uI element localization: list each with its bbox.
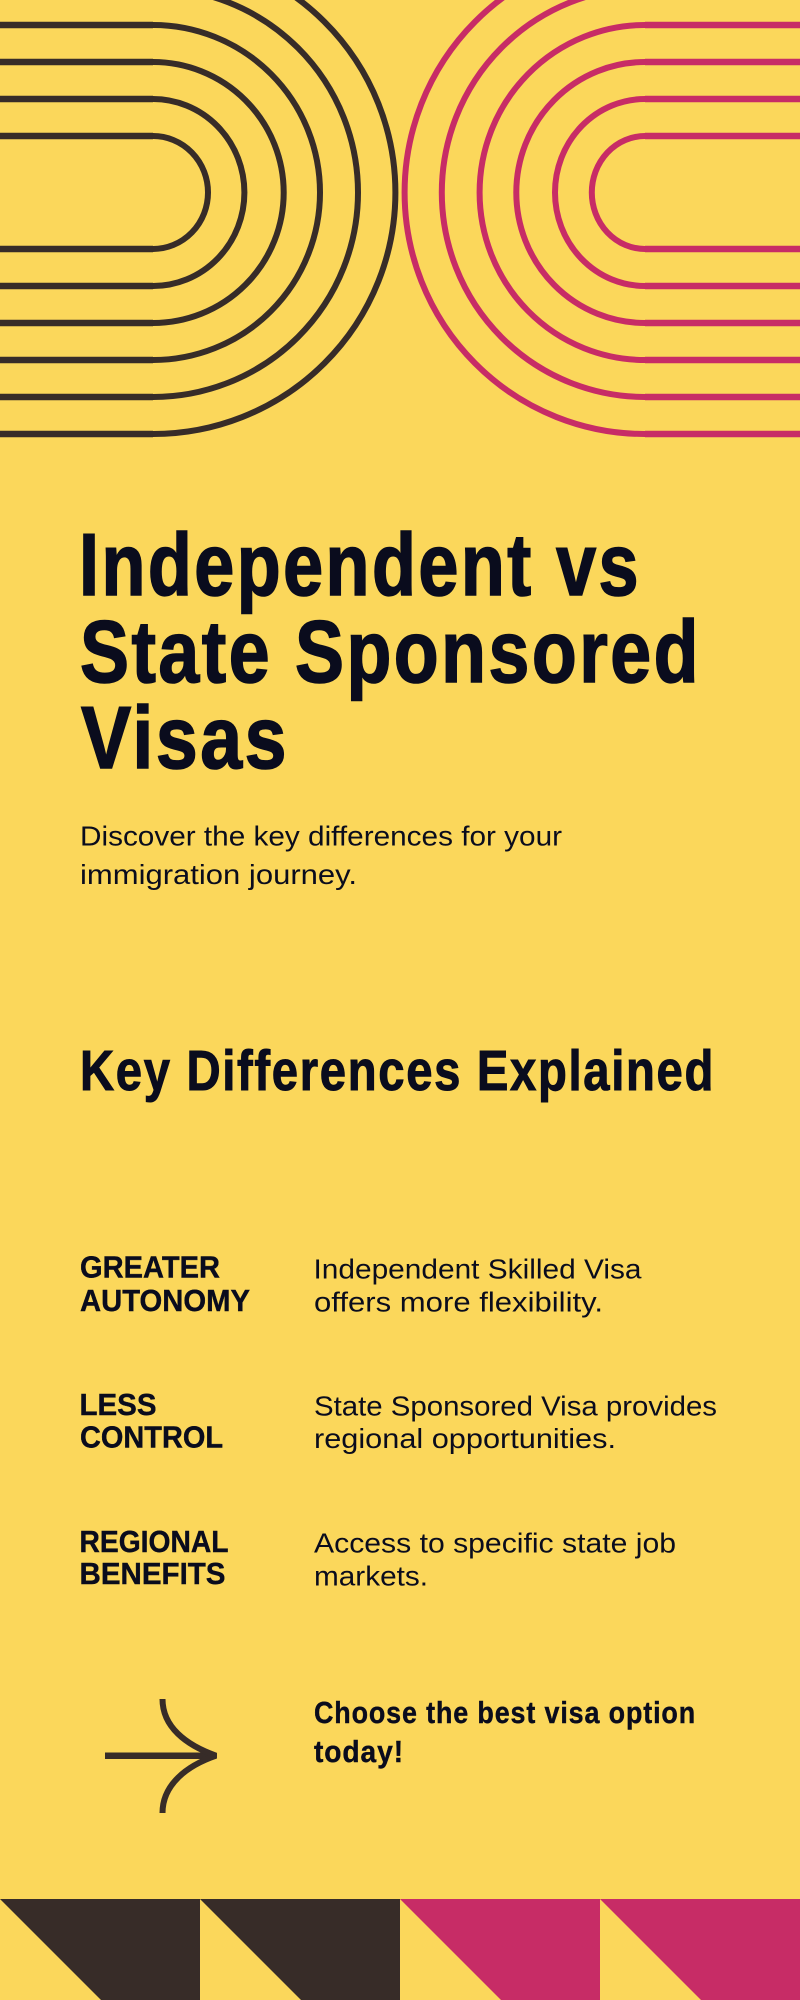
title <box>79 515 701 787</box>
subtitle <box>80 820 562 890</box>
row: regional benefits <box>80 1524 676 1592</box>
description: access to state job markets: Access to specific state job <box>314 1528 676 1558</box>
decorative pink concentric arches <box>405 0 800 434</box>
description: state sponsored visa: regional opportunities. <box>314 1423 616 1454</box>
label: greater autonomy: GREATER <box>80 1250 220 1284</box>
title: Independent vs <box>79 515 641 614</box>
call to action: today! <box>314 1734 404 1769</box>
icon: arrow <box>105 1699 216 1813</box>
row: greater autonomy <box>80 1250 642 1318</box>
subtitle: Discover the key differences for your <box>80 820 562 852</box>
label: regional benefits: REGIONAL <box>80 1524 228 1559</box>
label: greater autonomy <box>80 1250 250 1318</box>
description: access to state job markets <box>314 1528 676 1592</box>
description: independent skilled visa <box>314 1254 642 1318</box>
subtitle: immigration journey. <box>80 859 357 890</box>
description: state sponsored visa <box>314 1390 717 1454</box>
label: less control: LESS <box>80 1387 156 1422</box>
description: state sponsored visa: State Sponsored Visa provides <box>314 1390 717 1422</box>
decorative dark concentric arches <box>0 0 395 434</box>
call to action: Choose the best visa option <box>314 1695 696 1730</box>
description: independent skilled visa: offers more flexibility. <box>314 1286 603 1318</box>
label: regional benefits <box>80 1524 228 1591</box>
call to action <box>314 1695 696 1769</box>
description: access to state job markets: markets. <box>314 1560 428 1592</box>
label: regional benefits: BENEFITS <box>80 1556 226 1591</box>
description: independent skilled visa: Independent Skilled Visa <box>314 1254 642 1284</box>
footer triangles band <box>0 1899 800 2000</box>
row: less control <box>80 1387 717 1454</box>
label: less control: CONTROL <box>80 1420 223 1454</box>
label: less control <box>80 1387 223 1454</box>
title: Visas <box>81 688 289 787</box>
label: greater autonomy: AUTONOMY <box>80 1283 250 1318</box>
